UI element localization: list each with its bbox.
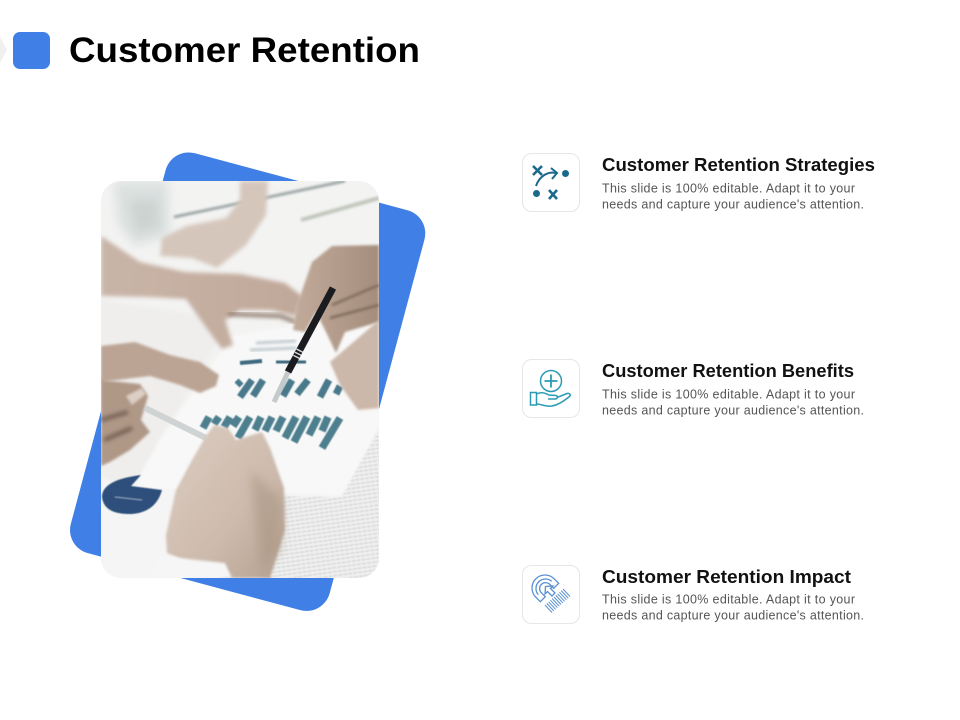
photo: hands reviewing charts: [101, 181, 379, 578]
icon tile: hand with plus: [522, 360, 580, 418]
upper bar row: [237, 361, 340, 397]
decorative chevron: [0, 37, 7, 63]
heading: Customer Retention Strategies: [602, 154, 875, 175]
fingers: lower right: [330, 320, 379, 410]
blue rotated backing panel: [65, 147, 431, 616]
title marker: blue square: [13, 32, 50, 69]
thumb highlight: [126, 388, 146, 405]
heading: Customer Retention Impact: [602, 566, 851, 587]
body text: needs and capture your audience's attention.: [602, 198, 864, 212]
faint header text on paper: [250, 341, 296, 350]
fist: front: [166, 425, 285, 578]
hand: left upper: [101, 342, 219, 393]
hand: top: [160, 181, 268, 268]
black pen: [274, 288, 333, 402]
icon tile: strategy play: [522, 154, 580, 212]
table shading: [101, 300, 230, 488]
newspaper: [262, 430, 379, 578]
icon tile: magnet attracting: [522, 566, 580, 624]
slide canvas: [0, 32, 874, 624]
body text: [602, 182, 864, 212]
item 3: Customer Retention Impact: [522, 566, 864, 624]
lower bar row: [203, 417, 340, 448]
body text: needs and capture your audience's attention.: [602, 608, 864, 622]
glass: [114, 181, 170, 246]
body text: [602, 592, 864, 622]
shadow under middle hand: [228, 314, 296, 322]
item 2: Customer Retention Benefits: [522, 360, 864, 418]
arm and hand: middle: [101, 236, 302, 349]
finger creases on right hand: [330, 285, 379, 318]
title: Customer Retention: [69, 31, 420, 70]
item 1: Customer Retention Strategies: [522, 154, 875, 212]
lower sheet: [101, 478, 240, 578]
hand: left lower: [101, 380, 150, 466]
background pens: [174, 181, 379, 220]
body text: needs and capture your audience's attention.: [602, 404, 864, 418]
shirt cuff: [176, 556, 232, 578]
fist shading: [250, 470, 282, 570]
paper sheet: [342, 472, 355, 494]
pie chart: [102, 475, 162, 514]
silver pen: [145, 408, 206, 438]
body text: This slide is 100% editable. Adapt it to your: [602, 592, 855, 606]
body text: [602, 388, 864, 418]
body text: This slide is 100% editable. Adapt it to your: [602, 388, 855, 402]
body text: This slide is 100% editable. Adapt it to your: [602, 182, 855, 196]
hand: right holding pen: [293, 245, 379, 353]
heading: Customer Retention Benefits: [602, 360, 854, 381]
dark gap between fingers: [101, 412, 132, 440]
